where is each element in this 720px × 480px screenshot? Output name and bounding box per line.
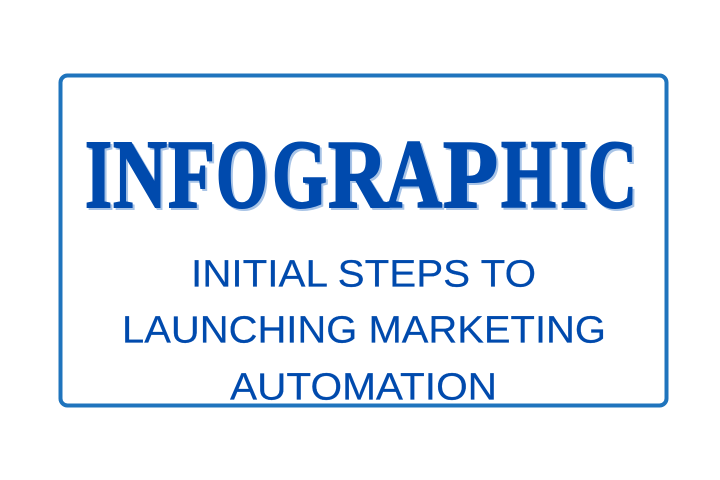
title: INFOGRAPHIC with drop shadow: O (216, 121, 268, 228)
title: INFOGRAPHIC with drop shadow: R (330, 123, 391, 230)
title: INFOGRAPHIC with drop shadow: G (274, 123, 329, 230)
title: INFOGRAPHIC with drop shadow: N (115, 123, 169, 230)
title: INFOGRAPHIC with drop shadow: P (445, 123, 500, 230)
title: INFOGRAPHIC with drop shadow: F (170, 123, 217, 230)
title: INFOGRAPHIC with drop shadow: R (328, 121, 389, 228)
title: INFOGRAPHIC with drop shadow: A (387, 123, 444, 230)
title: INFOGRAPHIC with drop shadow: O (218, 123, 270, 230)
subtitle: three lines: INITIAL STEPS TO (191, 254, 536, 296)
title: INFOGRAPHIC with drop shadow: F (168, 121, 215, 228)
title: INFOGRAPHIC with drop shadow: P (443, 121, 498, 228)
subtitle: three lines: AUTOMATION (230, 366, 497, 408)
subtitle: three lines: LAUNCHING MARKETING (122, 310, 606, 352)
title: INFOGRAPHIC with drop shadow: I (85, 121, 112, 228)
title: INFOGRAPHIC with drop shadow: H (501, 121, 556, 228)
title: INFOGRAPHIC with drop shadow: I (560, 121, 587, 228)
title: INFOGRAPHIC with drop shadow (85, 121, 639, 230)
title: INFOGRAPHIC with drop shadow: A (385, 121, 442, 228)
title: INFOGRAPHIC with drop shadow: I (87, 123, 114, 230)
subtitle: three lines (122, 254, 606, 408)
panel: blue rounded frame (60, 76, 666, 406)
title: INFOGRAPHIC with drop shadow: N (113, 121, 167, 228)
title: INFOGRAPHIC with drop shadow: C (588, 121, 637, 228)
title: INFOGRAPHIC with drop shadow: G (272, 121, 327, 228)
title: INFOGRAPHIC with drop shadow: C (590, 123, 639, 230)
title: INFOGRAPHIC with drop shadow: I (562, 123, 589, 230)
title: INFOGRAPHIC with drop shadow: H (503, 123, 558, 230)
